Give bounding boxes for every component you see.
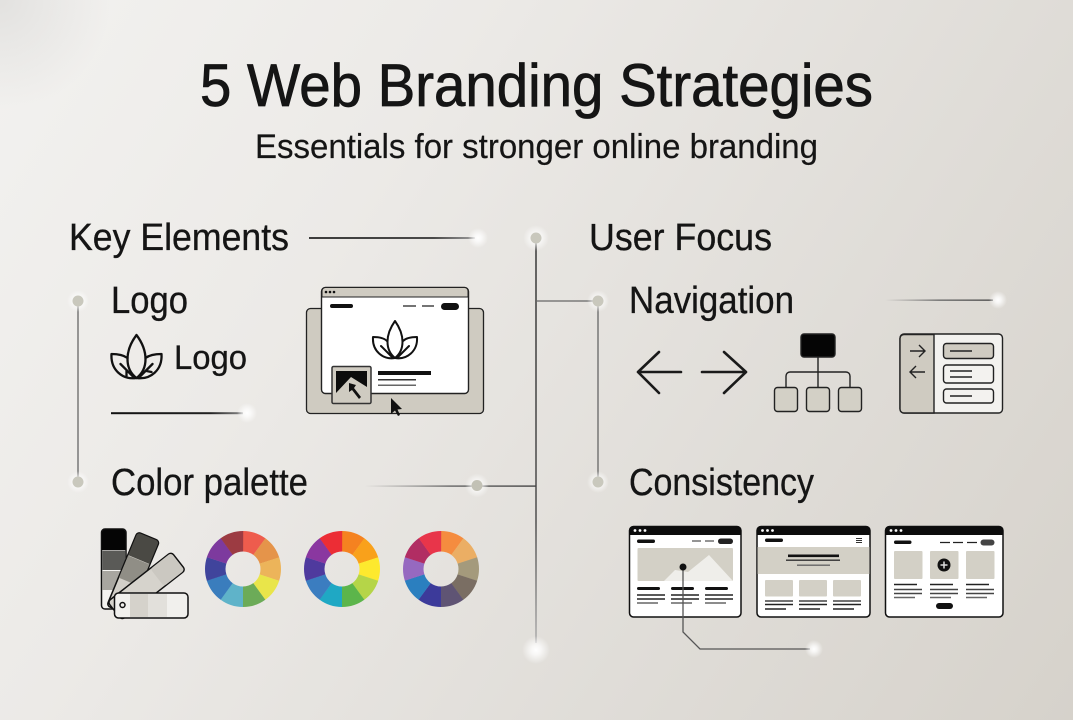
panel: navigation heading	[587, 280, 1007, 322]
illustration: website logo mockup	[306, 288, 484, 416]
icon: side navigation panel	[900, 334, 1002, 413]
central connector lines	[78, 238, 598, 643]
chart: color wheel 3	[413, 541, 469, 597]
icon: site hierarchy	[774, 334, 862, 412]
subtitle: Essentials for stronger online branding	[255, 128, 818, 166]
wireframe: page 3	[886, 526, 1003, 617]
heading: user focus: User Focus	[589, 217, 772, 259]
panel: logo: Logo	[111, 280, 188, 322]
chart: color wheel 1	[215, 541, 271, 597]
glow: connector end point	[522, 636, 550, 664]
panel: consistency heading: Consistency	[629, 462, 814, 504]
panel: navigation heading: Navigation	[629, 280, 794, 322]
chart: color wheel 2	[314, 541, 370, 597]
heading: key elements: Key Elements	[69, 217, 289, 259]
panel: logo: Logo	[174, 339, 247, 377]
icon: swatch fan	[102, 529, 188, 620]
wireframe: page 2	[757, 526, 870, 617]
title: 5 Web Branding Strategies	[200, 52, 873, 119]
panel: logo	[67, 280, 257, 423]
heading: key elements	[69, 217, 488, 259]
panel: color palette	[67, 462, 489, 504]
connector: wireframe callout	[680, 564, 823, 658]
wireframe: page 1	[630, 526, 741, 617]
icon: lotus logo	[111, 335, 162, 378]
icon: back and forward arrows	[638, 352, 746, 393]
panel: color palette: Color palette	[111, 462, 308, 504]
